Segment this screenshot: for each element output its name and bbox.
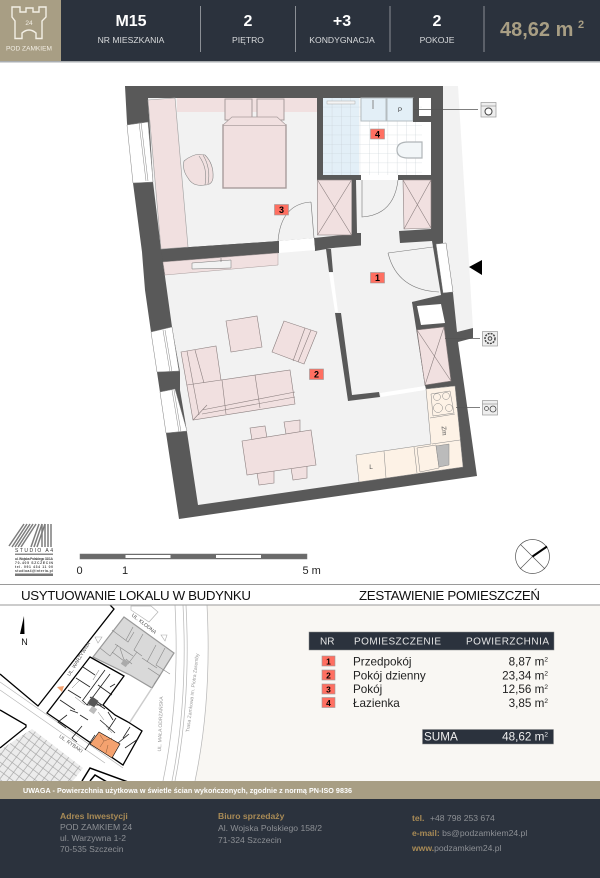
floor: PIĘTRO <box>232 35 264 45</box>
street labels: UL. RYBAKI <box>58 734 84 755</box>
street labels: Trasa Zamkowa im. Piotra Zaremby <box>185 653 201 733</box>
logo: Pod Zamkiem 24: POD ZAMKIEM <box>6 46 52 52</box>
logo: Studio A4: ul. Wojska Polskiego 31/1A <box>15 557 54 561</box>
apartment number: NR MIESZKANIA <box>98 35 165 45</box>
header bar <box>0 0 600 62</box>
row 2: 2 <box>326 670 331 680</box>
viewing markers <box>57 686 64 692</box>
toilet <box>397 142 422 158</box>
neighbouring building, grey <box>93 617 174 688</box>
row 2: Pokój dzienny <box>353 670 426 682</box>
contact <box>411 813 527 853</box>
icon: ventilation <box>445 332 498 346</box>
row 1: Przedpokój <box>353 656 411 668</box>
contact: www.podzamkiem24.pl <box>411 843 502 853</box>
highlighted apartment <box>90 732 120 758</box>
sum row: 48,62 m <box>502 730 544 744</box>
icon: washing machine <box>414 102 496 117</box>
row 2: 2 <box>544 670 548 678</box>
table header: POMIESZCZENIE <box>354 636 441 648</box>
storey <box>309 13 375 45</box>
label 3 <box>274 204 288 215</box>
scale bar: 5 m <box>302 565 321 577</box>
roads <box>0 605 208 781</box>
room labels <box>274 129 384 380</box>
bathroom <box>323 98 431 175</box>
storey: KONDYGNACJA <box>309 35 375 45</box>
terrace strip <box>443 86 473 338</box>
wardrobe at kitchen <box>417 327 451 385</box>
investment address: Adres Inwestycji <box>60 811 128 821</box>
section title lines <box>0 584 600 605</box>
row 4: 3,85 m <box>509 697 544 710</box>
row 1: 1 <box>326 656 331 666</box>
apartment number <box>98 13 165 45</box>
sofa <box>181 346 295 420</box>
table header <box>309 632 554 650</box>
bed <box>223 99 286 188</box>
row 3: 12,56 m <box>502 683 544 696</box>
kitchen units <box>356 386 463 482</box>
contact: e-mail: bs@podzamkiem24.pl <box>412 828 527 838</box>
street labels: UL. KŁODNA <box>130 613 158 636</box>
armchair <box>272 321 317 364</box>
total area: 2 <box>578 19 584 31</box>
row 4 <box>322 697 548 710</box>
row 2: 23,34 m <box>502 670 544 682</box>
interior wall partitions <box>161 234 453 401</box>
entrance door frame <box>436 243 453 293</box>
site map <box>0 605 208 782</box>
logo: Studio A4: 70-405 SZCZECIN <box>15 561 54 565</box>
row 1 <box>322 656 548 668</box>
scale bar: 1 <box>122 565 128 577</box>
label 1 <box>370 272 384 283</box>
row 3: Pokój <box>353 683 382 696</box>
dining table and chairs <box>242 420 316 485</box>
note band <box>0 781 600 799</box>
coffee table <box>226 316 262 352</box>
row 1: 2 <box>544 656 548 664</box>
row 3: 2 <box>544 684 548 691</box>
label 3: 3 <box>279 205 284 215</box>
TV unit <box>163 253 278 275</box>
rooms count: 2 <box>433 13 442 30</box>
rooms table <box>309 632 554 744</box>
logo: Pod Zamkiem 24: 24 <box>25 20 33 27</box>
row 2 <box>322 670 548 682</box>
kitchen units: L <box>369 464 373 471</box>
floor: 2 <box>244 13 253 30</box>
street labels <box>58 613 201 755</box>
sales office: Biuro sprzedaży <box>218 811 285 821</box>
entrance arrow <box>469 260 482 275</box>
logo: Studio A4: studioa4@interia.pl <box>15 569 53 573</box>
ventilation shaft <box>417 304 445 325</box>
wardrobe and headboard <box>148 98 317 249</box>
sum row <box>422 730 554 744</box>
floor: hall, living room and kitchen <box>163 175 463 505</box>
floor: room 3 <box>148 98 352 249</box>
outer walls <box>125 86 477 519</box>
hall closet <box>403 180 431 229</box>
logo: Pod Zamkiem 24 <box>0 0 61 61</box>
label 4: 4 <box>375 130 380 140</box>
building outline <box>47 657 142 765</box>
door openings <box>279 175 425 397</box>
logo: Studio A4 <box>9 524 54 576</box>
label 4 <box>370 129 384 140</box>
street labels: UL. MAŁA ODRZAŃSKA <box>156 696 165 752</box>
floor <box>232 13 264 45</box>
table header: NR <box>320 636 334 648</box>
label 1: 1 <box>375 273 380 283</box>
note band: UWAGA - Powierzchnia użytkowa w świetle ścian wykończonych, zgodnie z normą PN-ISO 9836 <box>23 786 352 795</box>
contact: tel. <box>412 813 424 823</box>
table header: POWIERZCHNIA <box>466 636 549 648</box>
closet <box>318 180 352 235</box>
scale bar: 0 <box>76 565 83 577</box>
sum row: SUMA <box>424 730 458 744</box>
cream background <box>195 606 600 781</box>
investment address: 70-535 Szczecin <box>60 844 124 854</box>
sales office: Al. Wojska Polskiego 158/2 <box>218 823 322 833</box>
rooms count <box>420 13 455 45</box>
row 3 <box>322 683 548 696</box>
south-west paved block <box>0 729 83 782</box>
row 4: 2 <box>544 698 548 705</box>
storey: +3 <box>333 13 351 30</box>
apartment number: M15 <box>115 13 147 30</box>
neighbouring block <box>0 605 114 706</box>
scale bar <box>76 554 321 577</box>
windows <box>127 122 187 433</box>
logo: Studio A4: tel. 091 434 11 00 <box>15 565 53 569</box>
north arrow <box>20 616 27 645</box>
row 1: 8,87 m <box>509 656 544 668</box>
footer <box>0 799 600 878</box>
heading: location: USYTUOWANIE LOKALU W BUDYNKU <box>21 588 251 603</box>
north arrow: N <box>21 637 28 647</box>
south building <box>82 768 128 782</box>
rooms count: POKOJE <box>420 35 455 45</box>
washing machine box: P <box>398 107 402 114</box>
investment address <box>60 811 132 854</box>
sum row: 2 <box>544 732 548 738</box>
icon: dishwasher <box>456 400 498 415</box>
heading: rooms summary: ZESTAWIENIE POMIESZCZEŃ <box>359 588 540 603</box>
label 2 <box>310 369 324 380</box>
kitchen units: Zm <box>440 426 447 436</box>
row 4: 4 <box>326 698 331 708</box>
investment address: ul. Warzywna 1-2 <box>60 833 126 843</box>
row 4: Łazienka <box>353 697 400 710</box>
compass <box>516 540 550 574</box>
logo: Studio A4: STUDIO A4 <box>15 548 53 554</box>
floor plan <box>125 86 498 519</box>
sales office: 71-324 Szczecin <box>218 835 282 845</box>
contact: +48 798 253 674 <box>430 813 495 823</box>
row 3: 3 <box>326 684 331 694</box>
street labels: UL. WARZYWNA <box>66 641 92 677</box>
chair <box>184 154 213 185</box>
label 2: 2 <box>314 370 319 380</box>
apartment building rooms <box>58 667 138 750</box>
total area: 48,62 m <box>500 19 573 41</box>
investment address: POD ZAMKIEM 24 <box>60 822 132 832</box>
sales office <box>218 811 322 845</box>
doors <box>278 180 439 292</box>
